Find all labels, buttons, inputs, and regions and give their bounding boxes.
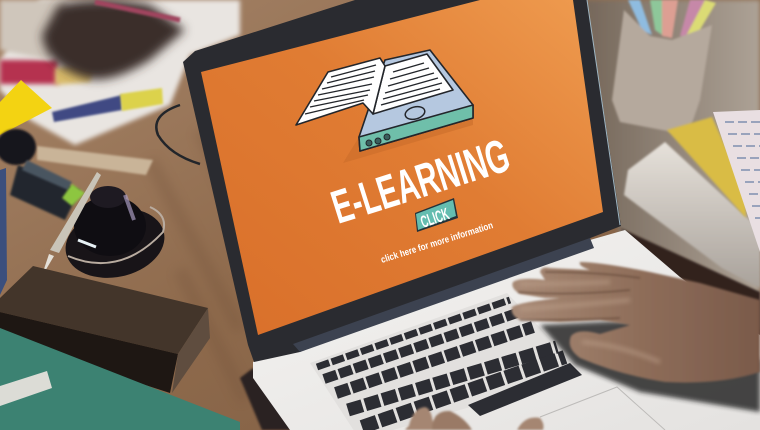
screen icon: book on tablet <box>296 50 473 163</box>
CLICK button <box>415 198 458 232</box>
papers and blurred hand at top left <box>0 0 240 145</box>
white book <box>624 142 760 288</box>
CLICK button: CLICK <box>418 204 452 232</box>
shadow beside the laptop <box>620 228 760 345</box>
highlighter marker <box>52 88 163 122</box>
fountain pen <box>41 172 101 278</box>
trackpad outline <box>540 387 665 430</box>
ink bottle on dish <box>59 186 171 287</box>
caption: click here for more information: click here for more information <box>380 220 495 266</box>
laptop lid bezel <box>183 0 621 362</box>
hinge strip <box>293 238 594 352</box>
lid edge highlight <box>587 0 620 225</box>
background wall at right <box>585 0 760 330</box>
shadow under laptop at left <box>240 368 298 430</box>
ruler <box>37 146 153 175</box>
white erasers <box>0 371 52 406</box>
orange screen <box>201 0 603 335</box>
dark marker with cap <box>0 129 85 220</box>
keyboard <box>310 293 583 430</box>
heading: E-LEARNING: E-LEARNING <box>325 128 516 234</box>
right hand on keyboard <box>512 262 760 383</box>
notebook edge at left <box>0 168 7 295</box>
wooden block <box>0 266 210 393</box>
left fingers at bottom edge <box>405 407 544 430</box>
hand shadow <box>540 320 760 412</box>
cable <box>156 105 200 164</box>
pen cup with pens <box>612 0 716 135</box>
yellow sticky note <box>0 80 52 135</box>
yellow book <box>667 117 746 218</box>
laptop base <box>253 230 760 430</box>
green folder <box>0 328 240 430</box>
patterned notebook <box>713 110 760 252</box>
